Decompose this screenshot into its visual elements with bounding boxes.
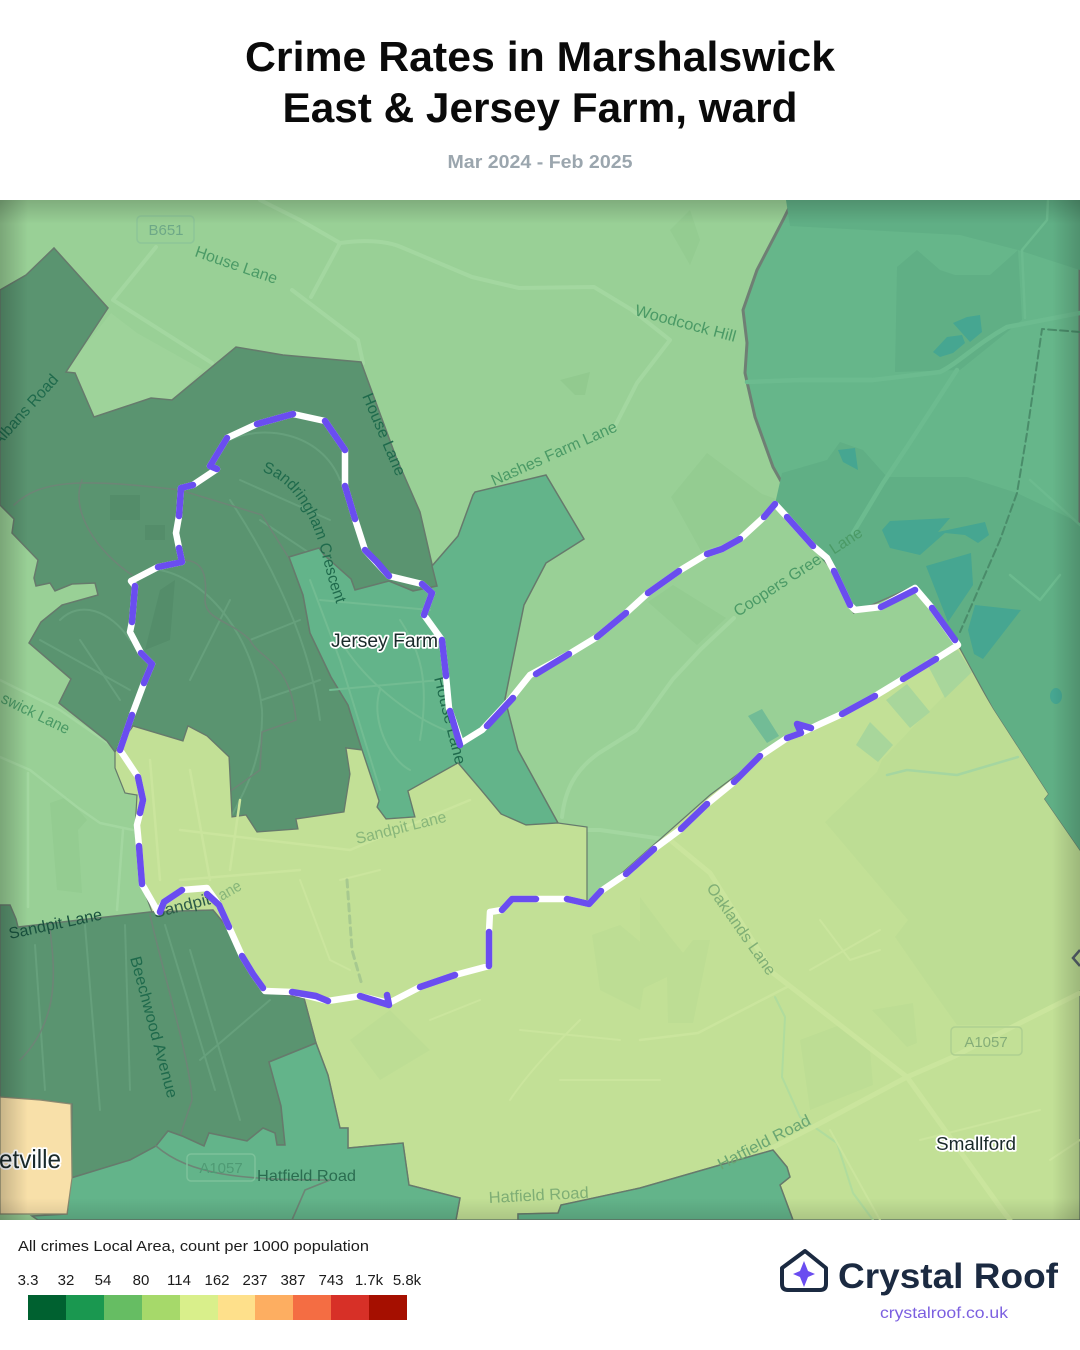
area: yellow-green south and east — [115, 645, 1080, 1220]
place label: Fleetville: etville — [0, 1144, 61, 1174]
road labels: Sandpit Lane — [7, 907, 104, 943]
area: tan Fleetville — [0, 1097, 72, 1214]
legend — [18, 1238, 422, 1320]
road labels: Sandpit — [152, 891, 213, 922]
streets in dark area — [40, 433, 340, 815]
streets south-west — [35, 925, 270, 1120]
edge chevron marker — [1073, 950, 1080, 966]
road labels: swick Lane — [0, 690, 72, 738]
top-right roads — [747, 200, 1080, 600]
area: top-right field tones — [775, 200, 1080, 851]
road shield: A1057 west: A1057 — [199, 1160, 243, 1177]
base fields — [50, 210, 779, 893]
title — [245, 33, 836, 131]
road labels: House Lane — [430, 675, 468, 766]
title: Crime Rates in Marshalswick — [245, 33, 836, 80]
legend scale values: 54 — [95, 1272, 111, 1289]
road labels: Hatfield Road — [488, 1185, 589, 1207]
field tones east — [774, 650, 1080, 1220]
road shield: B651: B651 — [148, 222, 184, 239]
base roads — [0, 200, 734, 910]
legend scale values: 743 — [318, 1272, 344, 1289]
wordmark: Crystal Roof — [838, 1257, 1058, 1296]
legend scale values: 237 — [242, 1272, 268, 1289]
legend colour ramp — [28, 1295, 407, 1320]
area: top-right mid green — [742, 208, 1080, 614]
road labels: Coopers Green Lane — [731, 524, 866, 620]
date range subtitle: Mar 2024 - Feb 2025 — [448, 152, 632, 172]
road labels: House Lane — [193, 244, 280, 288]
road labels: Woodcock Hill — [633, 302, 738, 346]
ward boundary route — [120, 414, 958, 1005]
legend title: All crimes Local Area, count per 1000 population — [18, 1238, 369, 1255]
road shield: A1057 west — [187, 1154, 255, 1181]
streets in Jersey Farm — [310, 580, 445, 790]
railway line — [960, 329, 1080, 632]
road labels: Beechwood Avenue — [126, 955, 180, 1100]
website: crystalroof.co.uk — [880, 1305, 1009, 1322]
legend scale values: 32 — [58, 1272, 74, 1289]
legend scale values: 3.3 — [18, 1272, 38, 1289]
legend scale values: 162 — [204, 1272, 230, 1289]
area: mid green Jersey Farm and central strip — [289, 475, 584, 825]
place label: Smallford: Smallford — [936, 1134, 1016, 1154]
legend scale values: 5.8k — [393, 1272, 422, 1289]
road labels: Oaklands Lane — [703, 881, 779, 979]
road labels: Hatfield Road — [715, 1112, 814, 1174]
road labels: Sandringham Crescent — [264, 462, 346, 604]
logo: Crystal Roof — [782, 1251, 1058, 1322]
road labels — [0, 246, 878, 1203]
road labels: Nashes Farm Lane — [489, 419, 620, 490]
area: dark green south-west — [0, 905, 316, 1178]
internal ward lines — [14, 480, 296, 790]
title: East & Jersey Farm, ward — [282, 84, 798, 131]
water bodies — [838, 315, 1062, 704]
footpath — [347, 880, 362, 985]
roads east and south — [236, 798, 1080, 1220]
road shield: B651 — [137, 216, 194, 243]
road labels: Sandpit Lane — [354, 809, 448, 848]
legend scale values: 1.7k — [355, 1272, 384, 1289]
area: mid green south east — [518, 1150, 793, 1220]
road labels: Lane — [208, 878, 245, 908]
road labels: House Lane — [358, 391, 408, 479]
legend scale values — [18, 1272, 422, 1289]
icon: house with star — [782, 1251, 826, 1290]
road shield: A1057 east — [951, 1027, 1022, 1055]
map edge shading — [0, 200, 1080, 1220]
area: dark green north-west — [0, 248, 437, 832]
legend scale values: 114 — [167, 1272, 191, 1289]
place label: Jersey Farm: Jersey Farm — [331, 631, 438, 652]
legend scale values: 80 — [133, 1272, 149, 1289]
area: mid green south — [32, 1043, 460, 1220]
road labels: Hatfield Road — [257, 1168, 356, 1185]
legend scale values: 387 — [280, 1272, 306, 1289]
road shield: A1057 east: A1057 — [964, 1034, 1008, 1051]
choropleth map panel — [0, 200, 1080, 1220]
